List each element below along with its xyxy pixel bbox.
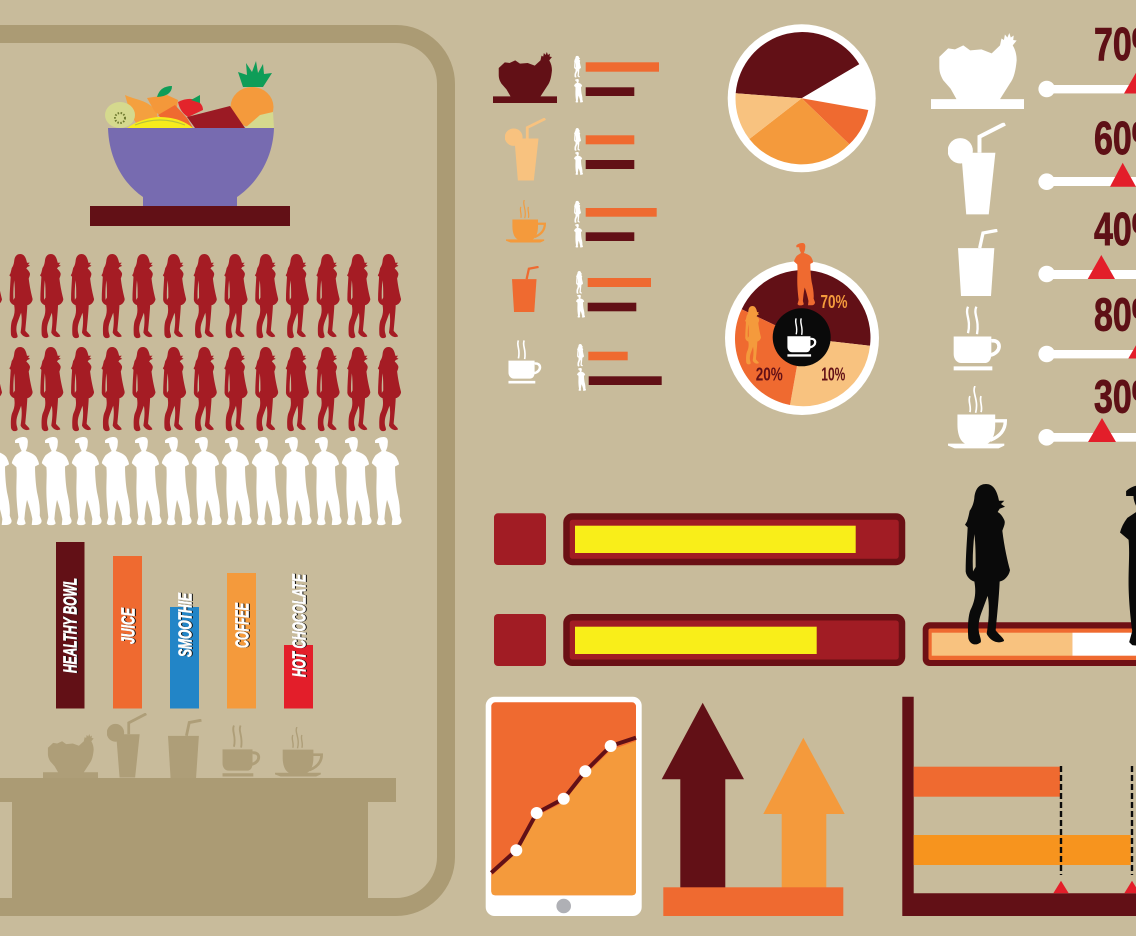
icon: bowl (931, 33, 1024, 109)
icon: teacup (506, 200, 545, 243)
donut chart: coffee share (725, 243, 879, 415)
icon: cup (512, 267, 539, 312)
bar labels: HEALTHY BOWL (60, 578, 80, 673)
icon: teacup (948, 386, 1005, 448)
label 20%: 20% (756, 364, 783, 384)
bar chart: favourite items (56, 542, 313, 708)
progress row 2 (494, 614, 902, 666)
data points (510, 740, 617, 856)
icon: cup silhouette (168, 720, 201, 778)
screen (491, 702, 636, 895)
icon: fruit bowl on shelf (90, 61, 290, 226)
trend line (491, 738, 636, 873)
pie chart: top (728, 24, 876, 172)
table with drink silhouettes (0, 714, 396, 898)
label 70%: 70% (820, 292, 848, 312)
tablet with line chart (486, 697, 642, 916)
fruit pile (105, 61, 274, 128)
icon: juice (505, 119, 545, 181)
horizontal bar chart (902, 697, 1136, 916)
panel: rounded frame (0, 34, 446, 907)
gender comparison: small icons and bars (493, 52, 662, 391)
shelf (90, 206, 290, 226)
slider: 40% (1038, 203, 1136, 282)
people row: women 2 (0, 347, 401, 431)
bar orange (914, 767, 1060, 797)
area under the line (491, 741, 636, 895)
bar labels: JUICE (118, 607, 138, 644)
people row: men (0, 437, 402, 525)
bar labels: SMOOTHIE (176, 592, 196, 657)
right column: white icons (931, 33, 1024, 448)
tablet body (486, 697, 642, 916)
icon: mug silhouette (223, 726, 259, 776)
bar light orange (914, 835, 1131, 865)
figure: black woman (965, 484, 1010, 644)
arrow: dark up (662, 703, 744, 888)
bowl (108, 128, 274, 206)
slider: 30% (1038, 371, 1136, 446)
axes (902, 697, 1136, 916)
base (663, 887, 843, 916)
icon: juice silhouette (107, 714, 146, 778)
label 10%: 10% (821, 364, 845, 384)
slider: 60% (1038, 112, 1136, 190)
icon: teacup silhouette (275, 727, 322, 776)
figure: black man (1120, 485, 1136, 645)
man figure (794, 243, 815, 305)
centre circle (773, 308, 831, 366)
dashed markers (1061, 766, 1132, 875)
icon: juice (948, 124, 1005, 214)
home button (556, 899, 571, 913)
woman figure (745, 306, 761, 364)
bar labels (60, 573, 310, 677)
icon: mug (508, 340, 540, 384)
icon: cup (958, 230, 997, 296)
progress row 1 (494, 513, 902, 565)
arrows on base (662, 703, 845, 916)
people row: women 1 (0, 254, 401, 338)
bar labels: COFFEE (232, 602, 252, 648)
bar labels: HOT CHOCOLATE (290, 573, 310, 677)
arrow: orange up (763, 738, 845, 888)
icon: bowl silhouette (43, 734, 98, 778)
progress bar: women versus men (923, 622, 1136, 666)
slider: 80% (1038, 289, 1136, 362)
triangle markers (1053, 881, 1136, 893)
icon: mug (954, 307, 999, 370)
comparison bars (586, 62, 662, 385)
icon: coffee mug (787, 318, 815, 357)
small people (574, 56, 586, 391)
table (0, 778, 396, 898)
icon: bowl (493, 52, 557, 103)
slider: 70% (1038, 18, 1136, 97)
